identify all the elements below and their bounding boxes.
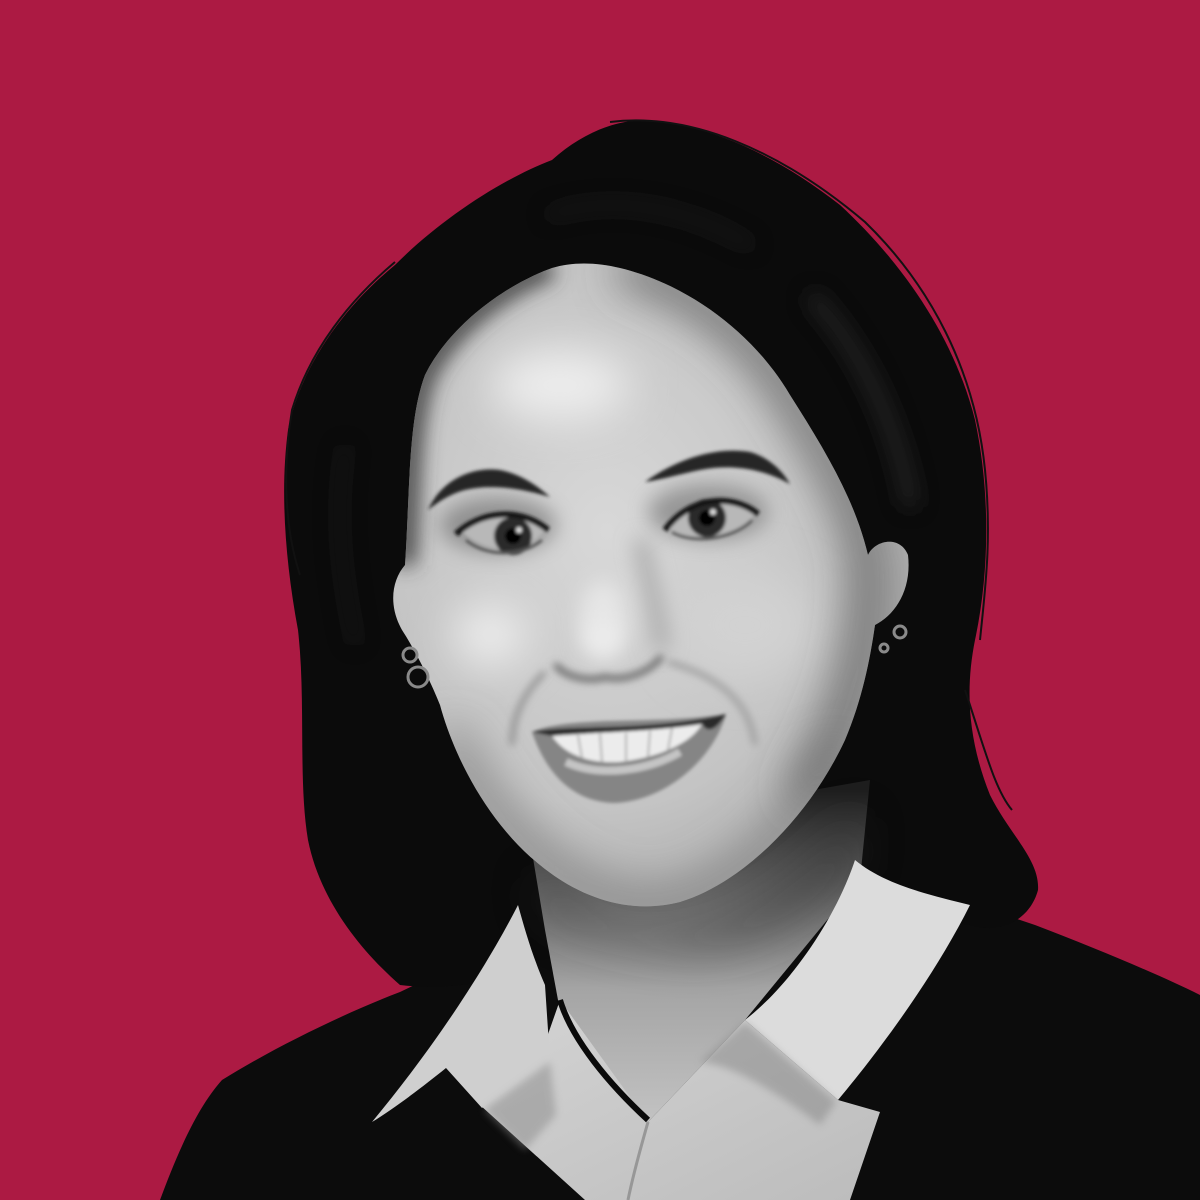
chin shadow [450,730,840,905]
jacket [160,900,1200,1200]
right collar [745,860,970,1100]
hairline shadow [405,268,552,565]
left collar [372,905,550,1122]
eye left [456,515,548,555]
nose shadow [640,540,662,650]
neck [530,780,870,1122]
stray hair strand outlines [286,120,1012,810]
smile folds [512,672,545,745]
collar shadow [700,1022,836,1125]
eye socket shadows [440,497,556,553]
shirt body [480,1000,880,1200]
shirt [372,860,970,1200]
eyebrow left [428,469,550,510]
forehead highlight [490,350,630,420]
cheek highlight right [737,600,801,662]
shirt placket crease [628,1122,648,1200]
portrait: woman on crimson background [160,119,1200,1200]
neck shadow [535,810,860,951]
earring left [403,648,428,687]
face [380,250,920,920]
eye right [665,499,758,539]
nose [555,623,662,679]
eyebrow right [645,451,790,484]
earring right [880,626,906,652]
mouth [532,714,726,803]
cheek highlight left [455,605,525,665]
hair [284,120,1038,987]
hair highlights [340,205,910,640]
necklace [560,1000,648,1120]
